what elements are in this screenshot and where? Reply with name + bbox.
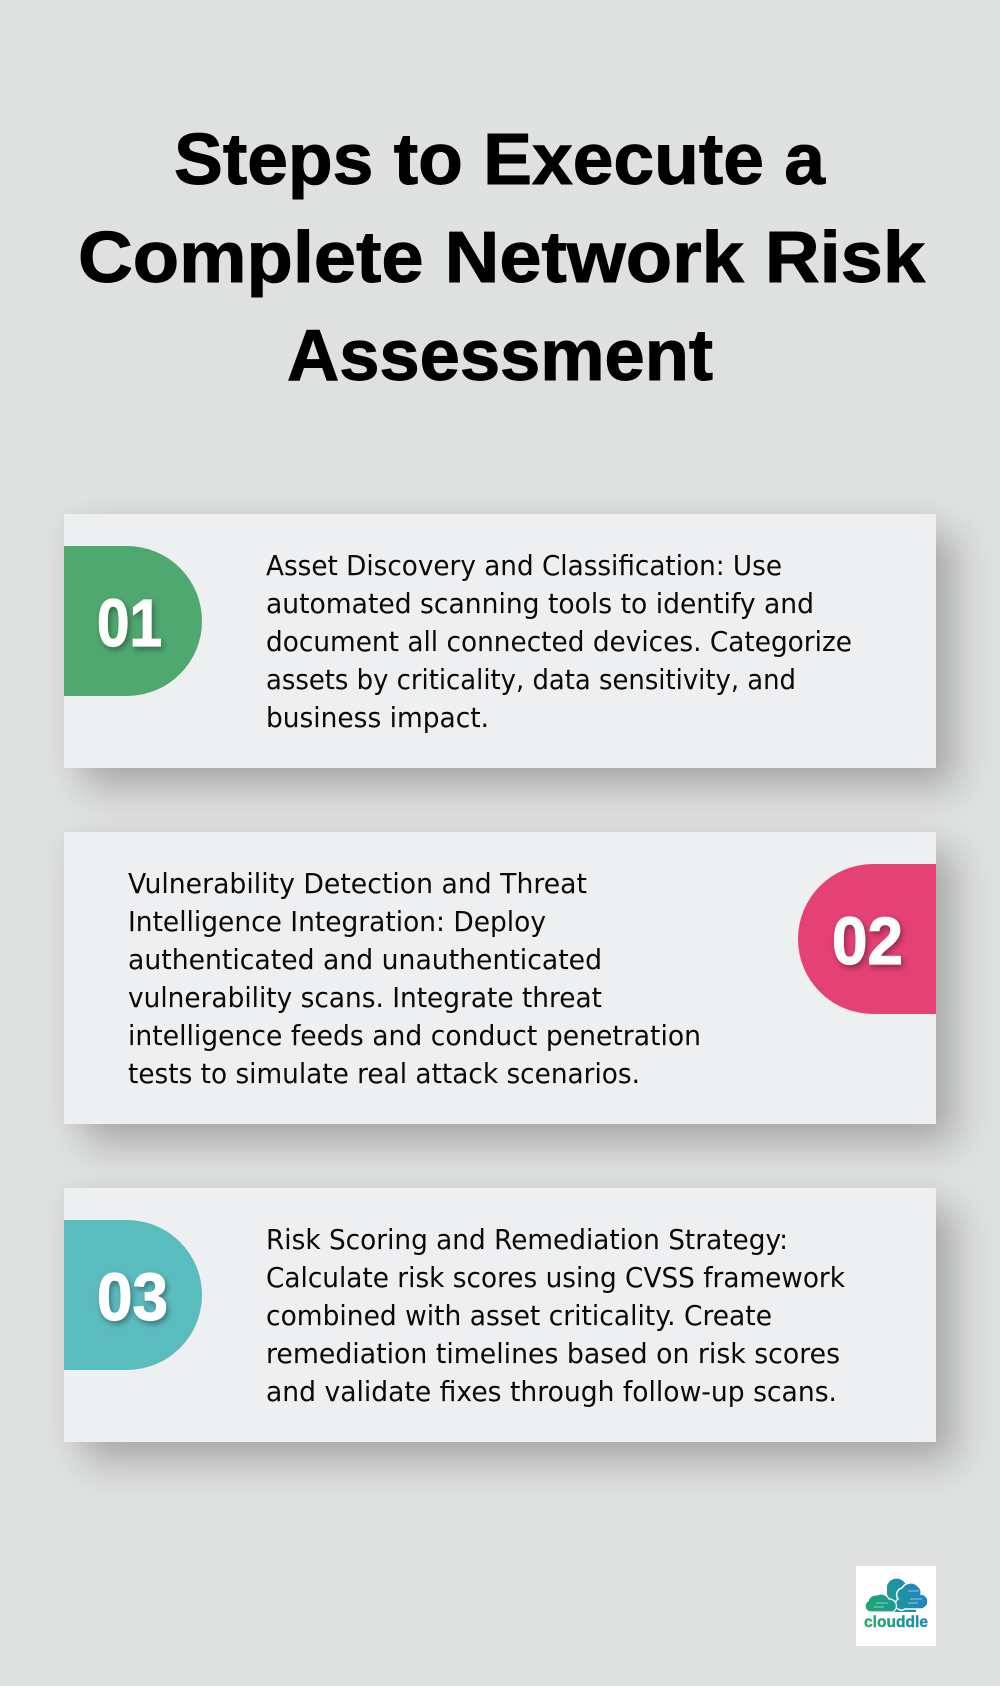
number: 01: 01: [97, 586, 162, 661]
text: step 2 description: Intelligence Integration: Deploy: [128, 906, 546, 938]
badge: 02: [798, 864, 936, 1014]
text: step 1 description: [266, 550, 852, 734]
title: Steps to Execute a: [174, 120, 826, 200]
text: step 1 description: assets by criticality, data sensitivity, and: [266, 664, 796, 696]
number: 03: 03: [97, 1260, 168, 1335]
title: Assessment: [287, 316, 713, 396]
logo: clouddle: clouddle: [864, 1614, 928, 1631]
panel: step 2: [64, 832, 936, 1124]
text: step 2 description: vulnerability scans. Integrate threat: [128, 982, 602, 1014]
text: step 3 description: remediation timelines based on risk scores: [266, 1338, 840, 1370]
text: step 1 description: document all connected devices. Categorize: [266, 626, 852, 658]
text: step 2 description: [128, 868, 701, 1090]
text: step 1 description: Asset Discovery and Classification: Use: [266, 550, 782, 582]
text: step 2 description: intelligence feeds and conduct penetration: [128, 1020, 701, 1052]
logo: clouddle: [856, 1566, 936, 1646]
text: step 3 description: and validate fixes through follow-up scans.: [266, 1376, 837, 1408]
text: step 3 description: [266, 1224, 845, 1408]
text: step 2 description: authenticated and unauthenticated: [128, 944, 602, 976]
title: Complete Network Risk: [78, 218, 926, 298]
text: step 3 description: Calculate risk scores using CVSS framework: [266, 1262, 845, 1294]
text: step 1 description: automated scanning tools to identify and: [266, 588, 814, 620]
panel: step 1: [64, 514, 936, 768]
text: step 3 description: Risk Scoring and Remediation Strategy:: [266, 1224, 788, 1256]
title: [78, 120, 926, 396]
text: step 2 description: Vulnerability Detection and Threat: [128, 868, 587, 900]
panel: step 3: [64, 1188, 936, 1442]
badge: 01: [64, 546, 202, 696]
text: step 2 description: tests to simulate real attack scenarios.: [128, 1058, 640, 1090]
number: 02: 02: [832, 904, 903, 979]
text: step 3 description: combined with asset criticality. Create: [266, 1300, 772, 1332]
text: step 1 description: business impact.: [266, 702, 489, 734]
badge: 03: [64, 1220, 202, 1370]
